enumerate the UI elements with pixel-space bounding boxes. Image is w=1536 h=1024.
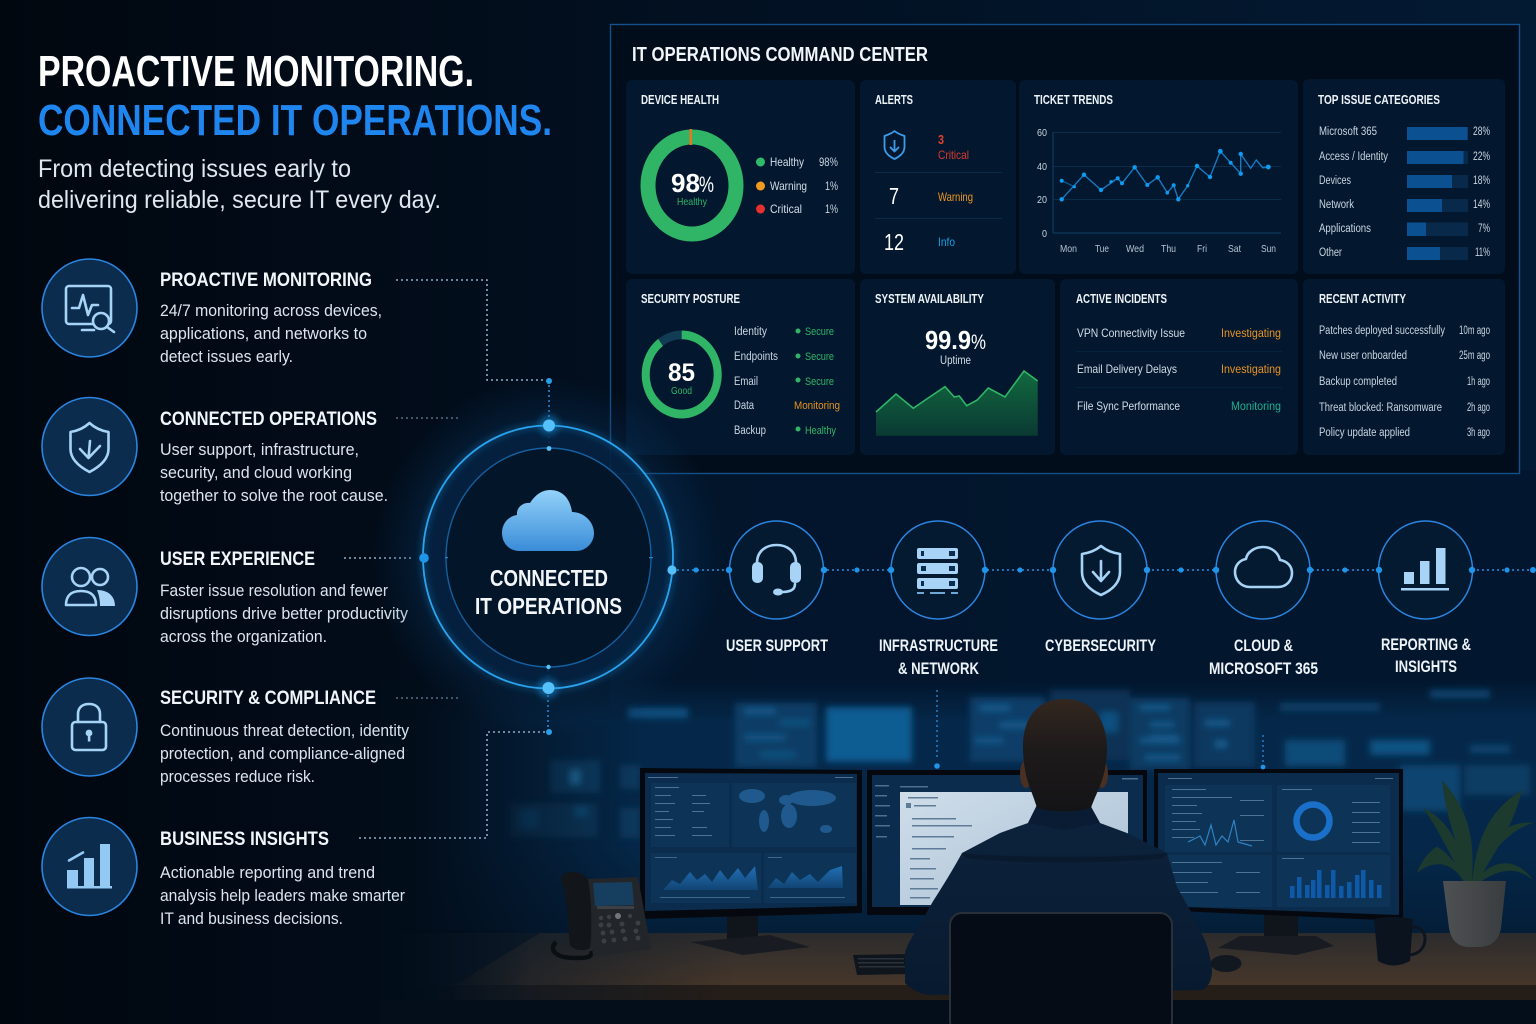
feature: connected operations: CONNECTED OPERATIONS: [160, 408, 377, 430]
service: cybersecurity: CYBERSECURITY: [1045, 637, 1156, 655]
status list: Backup: [734, 425, 766, 437]
donut chart: %: [699, 172, 714, 197]
service: cloud and microsoft 365: CLOUD &: [1234, 637, 1293, 655]
service: reporting and insights: [1376, 521, 1536, 676]
feature: connected operations: [42, 398, 388, 505]
panel: recent activity: 10m ago: [1459, 325, 1490, 337]
hub nodes: [419, 415, 677, 698]
panel: top issue categories: 7%: [1478, 223, 1490, 235]
feature: security and compliance: protection, and compliance-aligned: [160, 744, 405, 763]
panel: recent activity: Threat blocked: Ransomware: [1319, 402, 1442, 414]
phone: [553, 872, 651, 958]
donut chart: Healthy: [677, 196, 708, 208]
panel: ticket trends: 0: [1042, 228, 1047, 240]
area chart: [876, 371, 1038, 436]
panel: system availability: %: [971, 331, 986, 354]
background: blurred control room wall: [380, 680, 1536, 940]
panel: top issue categories: Applications: [1319, 223, 1371, 235]
gauge: [646, 335, 718, 414]
icon: bar chart: [42, 818, 137, 916]
panel: ticket trends: 20: [1037, 194, 1047, 206]
icon: server stack: [917, 548, 958, 593]
panel: ticket trends: Sat: [1228, 243, 1241, 255]
status list: Data: [734, 400, 754, 412]
service: reporting and insights: INSIGHTS: [1395, 658, 1457, 676]
headline: [38, 47, 552, 145]
hub label: IT OPERATIONS: [475, 593, 622, 619]
panel: active incidents: [1060, 279, 1298, 455]
feature: user experience: disruptions drive better productivity: [160, 604, 408, 623]
headline: CONNECTED IT OPERATIONS.: [38, 96, 552, 145]
feature: user experience: [42, 538, 408, 646]
icon: bars: [1401, 548, 1449, 590]
panel: recent activity: Patches deployed successfully: [1319, 325, 1445, 337]
subtitle: delivering reliable, secure IT every day.: [38, 186, 441, 214]
panel: ticket trends: Mon: [1060, 243, 1077, 255]
keyboard and mouse: [853, 954, 1242, 975]
panel: system availability: [860, 279, 1055, 455]
panel: security posture: [626, 279, 855, 455]
status list: Secure: [805, 326, 834, 338]
icon: monitor with magnifier: [42, 259, 137, 357]
panel: top issue categories: Network: [1319, 199, 1354, 211]
monitor center: [867, 770, 1147, 915]
panel: device health: [626, 80, 855, 274]
icon: cloud: [502, 490, 594, 551]
feature: user experience: USER EXPERIENCE: [160, 548, 315, 570]
panel: active incidents: Investigating: [1221, 364, 1281, 376]
feature: business insights: analysis help leaders make smarter: [160, 886, 405, 905]
dashboard: IT operations command center: [610, 24, 1520, 474]
panel: security posture: SECURITY POSTURE: [641, 292, 740, 306]
desk: [380, 930, 1536, 1024]
monitor left: [640, 768, 862, 955]
panel: recent activity: [1303, 279, 1505, 455]
gauge: Good: [671, 385, 692, 397]
panel: ticket trends: Sun: [1261, 243, 1276, 255]
panel: active incidents: Investigating: [1221, 328, 1281, 340]
panel: top issue categories: Devices: [1319, 175, 1351, 187]
feature: connected operations: together to solve the root cause.: [160, 486, 388, 505]
legend: Warning: [770, 179, 807, 193]
hub label: [475, 565, 622, 619]
panel: recent activity: Backup completed: [1319, 376, 1397, 388]
feature: proactive monitoring: detect issues early.: [160, 347, 293, 366]
panel: top issue categories: Access / Identity: [1319, 151, 1388, 163]
legend: 1%: [825, 181, 838, 193]
service: cloud and microsoft 365: [1209, 521, 1318, 678]
feature: business insights: BUSINESS INSIGHTS: [160, 828, 329, 850]
legend: Healthy: [770, 155, 804, 169]
gauge: 85: [668, 359, 695, 387]
coffee mug: [1374, 917, 1425, 966]
panel: recent activity: 3h ago: [1467, 427, 1490, 439]
status list: Secure: [805, 351, 834, 363]
subtitle: From detecting issues early to: [38, 155, 351, 183]
legend: 98%: [819, 157, 838, 169]
panel: ticket trends: Thu: [1161, 243, 1176, 255]
panel: recent activity: New user onboarded: [1319, 350, 1407, 362]
service: cloud and microsoft 365: MICROSOFT 365: [1209, 660, 1318, 678]
panel: system availability: Uptime: [940, 355, 971, 367]
panel: ticket trends: TICKET TRENDS: [1034, 93, 1113, 107]
feature: business insights: IT and business decisions.: [160, 909, 343, 928]
panel: ticket trends: 60: [1037, 127, 1047, 139]
panel: active incidents: Monitoring: [1231, 401, 1281, 413]
bar chart: [1407, 127, 1468, 260]
hub label: CONNECTED: [490, 565, 608, 591]
panel: alerts: Critical: [938, 148, 969, 162]
icon: headset: [752, 545, 801, 596]
panel: active incidents: File Sync Performance: [1077, 399, 1180, 413]
status list: Email: [734, 376, 758, 388]
connector line: service row: [677, 567, 1536, 573]
dashboard title: IT OPERATIONS COMMAND CENTER: [632, 44, 928, 66]
panel: alerts: 3: [938, 132, 944, 147]
panel: alerts: [860, 80, 1016, 274]
service: cybersecurity: [1045, 521, 1156, 655]
status list: Healthy: [805, 425, 836, 437]
icon: padlock: [42, 678, 137, 776]
panel: system availability: SYSTEM AVAILABILITY: [875, 292, 985, 306]
panel: active incidents: Email Delivery Delays: [1077, 362, 1177, 376]
panel: alerts: Info: [938, 235, 955, 249]
icon: shield: [1082, 546, 1120, 595]
legend: 1%: [825, 204, 838, 216]
legend: [756, 155, 838, 216]
service: reporting and insights: REPORTING &: [1381, 636, 1471, 654]
status list: Secure: [805, 376, 834, 388]
panel: top issue categories: TOP ISSUE CATEGORIES: [1318, 93, 1440, 107]
feature: proactive monitoring: applications, and networks to: [160, 324, 367, 343]
panel: top issue categories: Other: [1319, 247, 1342, 259]
status list: Monitoring: [794, 400, 840, 412]
panel: recent activity: Policy update applied: [1319, 427, 1410, 439]
connector lines: [344, 280, 1265, 838]
feature: proactive monitoring: [42, 259, 382, 366]
feature: security and compliance: processes reduce risk.: [160, 767, 315, 786]
feature: user experience: Faster issue resolution and fewer: [160, 581, 388, 600]
service: infrastructure and network: & NETWORK: [898, 660, 979, 678]
panel: active incidents: VPN Connectivity Issue: [1077, 326, 1185, 340]
icon: people: [42, 538, 137, 636]
panel: top issue categories: 11%: [1475, 247, 1490, 259]
headline: PROACTIVE MONITORING.: [38, 47, 474, 96]
panel: top issue categories: [1303, 79, 1505, 274]
feature: user experience: across the organization.: [160, 627, 327, 646]
panel: recent activity: 1h ago: [1467, 376, 1490, 388]
icon: alert shield: [884, 131, 904, 159]
panel: alerts: 12: [884, 229, 904, 255]
feature: proactive monitoring: PROACTIVE MONITORING: [160, 269, 372, 291]
panel: ticket trends: Tue: [1095, 243, 1109, 255]
line chart: [1060, 149, 1271, 202]
panel: ticket trends: Wed: [1126, 243, 1144, 255]
feature: security and compliance: [42, 678, 409, 786]
legend: Critical: [770, 202, 802, 216]
panel: recent activity: 2h ago: [1467, 402, 1490, 414]
central hub: connected IT operations: [373, 377, 723, 737]
feature: security and compliance: SECURITY & COMPLIANCE: [160, 687, 376, 709]
icon: cloud outline: [1235, 547, 1292, 587]
panel: top issue categories: Microsoft 365: [1319, 126, 1377, 138]
status list: Endpoints: [734, 351, 778, 363]
monitor right: [1154, 769, 1403, 955]
panel: top issue categories: 22%: [1473, 151, 1490, 163]
plant: [1417, 780, 1533, 947]
panel: ticket trends: Fri: [1197, 243, 1207, 255]
panel: ticket trends: 40: [1037, 161, 1047, 173]
feature: business insights: Actionable reporting and trend: [160, 863, 375, 882]
panel: top issue categories: 18%: [1473, 175, 1490, 187]
feature: business insights: [42, 818, 405, 928]
service: user support: USER SUPPORT: [726, 637, 828, 655]
panel: recent activity: RECENT ACTIVITY: [1319, 292, 1407, 306]
subtitle: [38, 155, 441, 214]
person at desk: [905, 699, 1212, 1024]
panel: alerts: 7: [889, 183, 899, 209]
icon: shield: [42, 398, 137, 496]
service: infrastructure and network: [879, 521, 998, 678]
service: user support: [726, 521, 828, 655]
feature: connected operations: User support, infrastructure,: [160, 440, 359, 459]
service: infrastructure and network: INFRASTRUCTURE: [879, 637, 998, 655]
feature: proactive monitoring: 24/7 monitoring across devices,: [160, 301, 382, 320]
status list: [734, 326, 840, 437]
panel: top issue categories: 28%: [1473, 126, 1490, 138]
panel: top issue categories: 14%: [1473, 199, 1490, 211]
panel: device health: DEVICE HEALTH: [641, 93, 719, 107]
panel: alerts: ALERTS: [875, 93, 913, 107]
feature: security and compliance: Continuous threat detection, identity: [160, 721, 409, 740]
donut chart: 98: [671, 168, 700, 198]
status list: Identity: [734, 326, 767, 338]
panel: alerts: Warning: [938, 190, 973, 204]
panel: recent activity: 25m ago: [1459, 350, 1490, 362]
panel: ticket trends: [1019, 80, 1298, 274]
panel: active incidents: ACTIVE INCIDENTS: [1076, 292, 1167, 306]
feature: connected operations: security, and cloud working: [160, 463, 352, 482]
panel: system availability: 99.9: [925, 325, 971, 355]
donut chart: [648, 129, 736, 234]
